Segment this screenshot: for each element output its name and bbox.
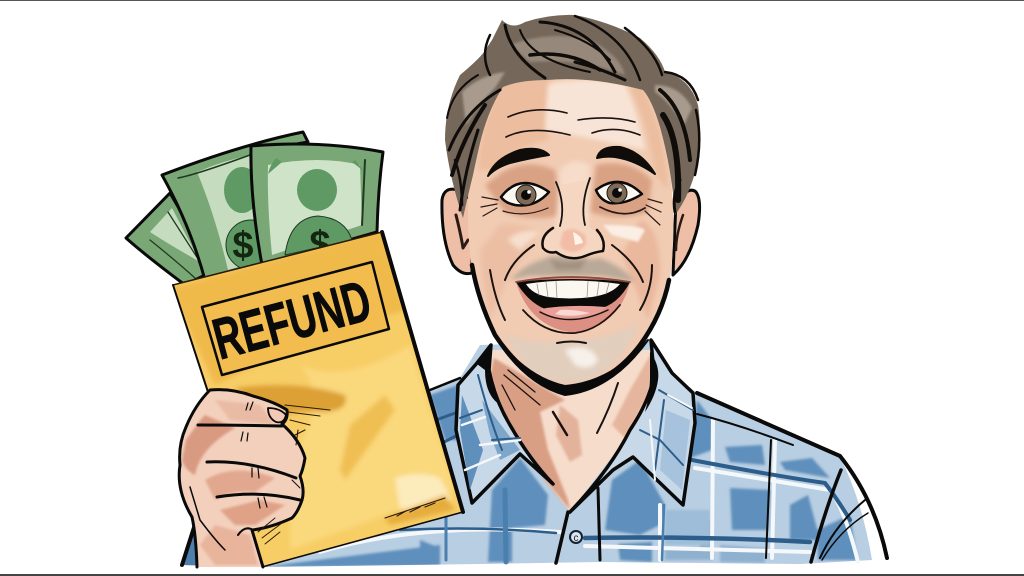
hand shading [182, 400, 285, 565]
jaw outline [472, 265, 669, 390]
nose [542, 178, 604, 258]
smile lines [505, 245, 643, 282]
plaid dark lines [400, 412, 850, 562]
right collar [570, 340, 695, 512]
hand holding envelope [179, 390, 305, 567]
forehead wrinkles [506, 110, 640, 137]
right ear [673, 190, 700, 275]
refund label: REFUND [206, 268, 378, 372]
face [468, 72, 673, 395]
neck [488, 350, 660, 512]
middle bill: $ [232, 225, 254, 267]
shirt button [569, 530, 583, 544]
chin grey shading [508, 326, 636, 383]
shirt button: c [574, 533, 578, 544]
thumb nail [268, 408, 286, 422]
envelope [170, 230, 463, 567]
soft skin shading [478, 72, 668, 383]
muzzle grey shadow [510, 255, 635, 282]
eye socket shading [485, 164, 562, 218]
sleeve and chest shading [262, 385, 857, 567]
refund label [202, 262, 389, 375]
envelope watercolor shading [170, 230, 455, 550]
left ear [442, 189, 472, 274]
cheek shading [481, 225, 530, 313]
left eye [501, 183, 549, 214]
right eyebrow [597, 147, 655, 174]
middle bill [162, 132, 308, 280]
front bill [251, 144, 383, 266]
plaid white lines [320, 420, 858, 562]
left eyebrow [488, 149, 549, 176]
crow's feet [481, 197, 662, 225]
forehead shading [478, 72, 552, 170]
right eye [596, 182, 645, 214]
front bill: $ [309, 224, 331, 266]
shirt black outlines [182, 378, 887, 565]
back bill [126, 193, 215, 285]
hair [445, 15, 700, 218]
left collar [456, 345, 553, 503]
open mouth [516, 276, 630, 343]
plaid shirt [181, 340, 887, 567]
